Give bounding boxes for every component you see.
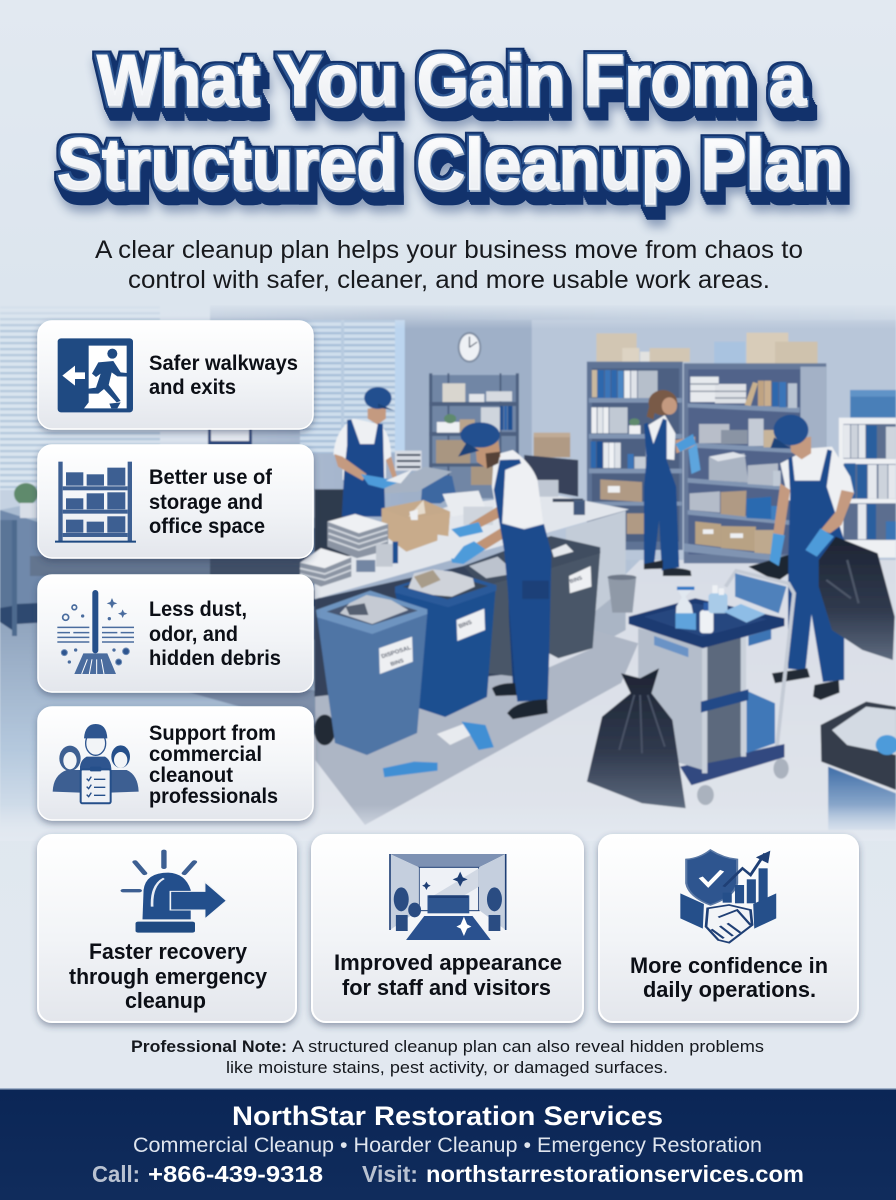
- grey disposal bin: [463, 536, 600, 680]
- icon: clean lobby: [390, 854, 506, 940]
- professional note: Professional Note:: [131, 1037, 287, 1056]
- back left worker: [333, 387, 412, 517]
- icon: team with clipboard: [53, 724, 139, 803]
- scene base: wall, windows, left desk and floor: [0, 305, 896, 840]
- blue disposal bin: [395, 569, 496, 717]
- steel blue disposal bin: DISPOSAL: [381, 645, 413, 660]
- large shelf units: [587, 362, 826, 563]
- card: safer walkways: [38, 321, 313, 429]
- scene detail group in reference crop coordinates: [300, 320, 896, 830]
- desk cups and items: [356, 502, 585, 572]
- card text: storage and: [149, 490, 263, 514]
- card: faster recovery: [38, 835, 296, 1022]
- worker at shelves: [644, 390, 701, 576]
- card text: [149, 597, 281, 670]
- card text: hidden debris: [149, 646, 281, 670]
- card text: More confidence in: [630, 953, 828, 978]
- subtitle: A clear cleanup plan helps your business move from chaos to: [95, 236, 803, 264]
- card: professionals: [38, 707, 313, 820]
- steel blue disposal bin: BINS: [390, 658, 405, 668]
- professional note: A structured cleanup plan can also reveal hidden problems: [292, 1037, 764, 1056]
- footer bar: [0, 1088, 896, 1200]
- right floor: [300, 560, 896, 840]
- contact line: +866-439-9318: [148, 1161, 323, 1187]
- card: dust: [38, 575, 313, 692]
- wall panels: [405, 320, 532, 507]
- icon: storage shelf: [55, 462, 136, 543]
- card text: for staff and visitors: [342, 975, 551, 1000]
- card text: Support from: [149, 721, 276, 745]
- large black trash bag held by worker: [819, 537, 895, 660]
- left metal shelf: [429, 373, 519, 500]
- back leg of centre worker: [492, 553, 536, 696]
- card text: Less dust,: [149, 597, 247, 621]
- office cleanup scene: [0, 303, 896, 841]
- desk with counter and pedestal: [314, 489, 629, 697]
- icon: siren with arrow: [123, 851, 227, 933]
- right white shelf with binders: [839, 390, 896, 558]
- card text: Faster recovery: [89, 939, 247, 964]
- card text: cleanout: [149, 763, 233, 787]
- card text: [149, 351, 298, 399]
- tan box on wall cabinet: [534, 433, 570, 457]
- card text: commercial: [149, 742, 262, 766]
- card: storage: [38, 445, 313, 558]
- card text: [149, 465, 273, 538]
- contact line: Visit:: [362, 1161, 418, 1187]
- cardboard box: [382, 500, 450, 552]
- card text: [69, 939, 267, 1013]
- contact line: [92, 1161, 804, 1187]
- icon: emergency exit: [58, 338, 133, 412]
- subtitle: control with safer, cleaner, and more usable work areas.: [128, 266, 770, 294]
- card text: odor, and: [149, 622, 238, 646]
- card text: [149, 721, 278, 808]
- card text: [334, 950, 562, 1000]
- back window: [300, 320, 405, 460]
- card text: through emergency: [69, 964, 267, 989]
- card text: daily operations.: [643, 977, 816, 1002]
- title: What You Gain From a: [97, 41, 807, 121]
- blue disposal bin: BINS: [458, 620, 473, 630]
- contact line: northstarrestorationservices.com: [426, 1161, 804, 1187]
- services line: Commercial Cleanup • Hoarder Cleanup • Emergency Restoration: [133, 1133, 762, 1157]
- monitor and chair: [384, 451, 585, 525]
- boxes on top of shelves: [596, 333, 818, 364]
- trash bin with liner, lower right: [821, 702, 896, 830]
- centre worker: [437, 422, 552, 719]
- card text: Safer walkways: [149, 351, 298, 375]
- paper stacks on desk: [300, 514, 388, 587]
- steel blue disposal bin: [314, 591, 427, 755]
- subtitle: [95, 236, 803, 294]
- card text: Improved appearance: [334, 950, 562, 975]
- contact line: Call:: [92, 1161, 140, 1187]
- grey disposal bin: BINS: [569, 575, 584, 585]
- card text: and exits: [149, 375, 236, 399]
- card text: office space: [149, 514, 265, 538]
- professional note: [131, 1037, 764, 1077]
- wall clock: [458, 332, 481, 363]
- gloves on the floor: [383, 722, 494, 777]
- waste basket: [607, 575, 636, 613]
- icon: shield, growth chart and handshake: [680, 850, 776, 943]
- professional note: like moisture stains, pest activity, or damaged surfaces.: [226, 1058, 668, 1077]
- right worker: [748, 415, 854, 700]
- card text: [630, 953, 828, 1002]
- scene top fade: [0, 303, 896, 329]
- card text: cleanup: [125, 988, 206, 1013]
- icon: broom: [57, 590, 134, 674]
- blurred scene artwork: [0, 305, 896, 840]
- card text: professionals: [149, 784, 278, 808]
- scene bottom fade: [0, 805, 896, 841]
- title: Structured Cleanup Plan: [57, 125, 843, 205]
- card: improved appearance: [312, 835, 583, 1022]
- card: more confidence: [599, 835, 858, 1022]
- title: [57, 41, 843, 205]
- card text: Better use of: [149, 465, 273, 489]
- supply cart: [629, 571, 794, 805]
- grey floor mat: [315, 630, 638, 825]
- cleaning bottles: [675, 585, 766, 633]
- company name: NorthStar Restoration Services: [232, 1101, 663, 1131]
- tied black trash bag: [587, 668, 686, 808]
